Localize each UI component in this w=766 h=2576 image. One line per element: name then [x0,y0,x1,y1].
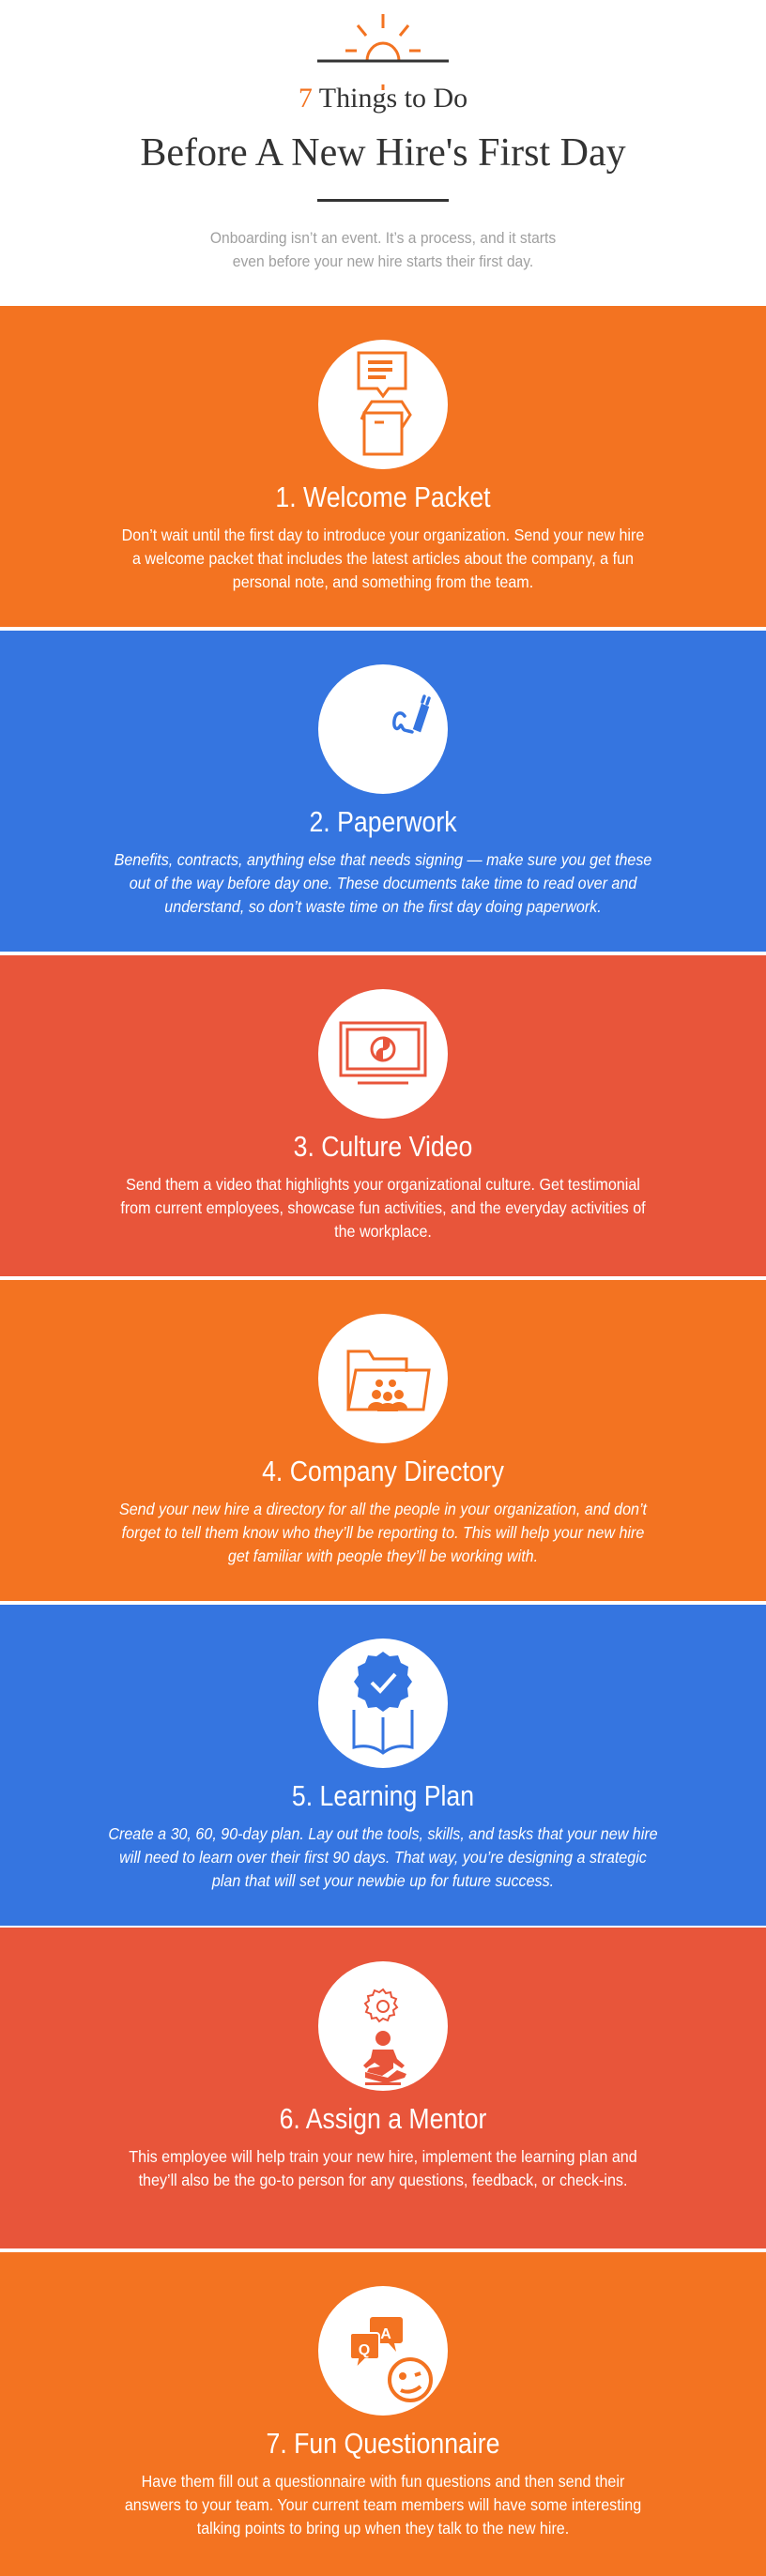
panel: 3 culture video [0,955,766,1276]
text: This employee will help train your new hire, implement the learning plan and [129,2147,637,2166]
text: will need to learn over their first 90 days. That way, you’re designing a strategic [119,1848,647,1867]
panel: 6 assign a mentor [0,1928,766,2248]
icon: Q&A bubbles with smiley [318,2286,448,2416]
text: plan that will set your newbie up for future success. [212,1871,554,1890]
text [122,526,644,591]
panel: 2 paperwork [0,631,766,952]
icon: signature pen [318,664,448,794]
title line 1: 7 Things to Do [299,83,467,114]
text: the workplace. [334,1222,432,1241]
title line 2: Before A New Hire's First Day [140,131,626,175]
text: answers to your team. Your current team members will have some interesting [125,2495,641,2514]
text [115,850,651,916]
panel: 7 fun questionnaire [0,2252,766,2576]
icon: Q&A bubbles with smiley: A [380,2326,391,2342]
subtitle: Onboarding isn’t an event. It’s a process, and it starts [210,229,556,247]
text: understand, so don’t waste time on the first day doing paperwork. [164,897,602,916]
icon: Q&A bubbles with smiley: Q [359,2342,370,2358]
text: Create a 30, 60, 90-day plan. Lay out the tools, skills, and tasks that your new hire [108,1824,658,1843]
text [108,1824,658,1890]
text [125,2472,641,2538]
panel: 5 learning plan [0,1605,766,1926]
icon: rising sun [317,14,449,90]
text: they’ll also be the go-to person for any questions, feedback, or check-ins. [139,2171,627,2189]
text: get familiar with people they’ll be working with. [228,1547,538,1565]
subtitle [210,229,556,270]
text: Have them fill out a questionnaire with fun questions and then send their [142,2472,624,2491]
heading: 5. Learning Plan [292,1779,474,1812]
text [129,2147,637,2189]
heading: 7. Fun Questionnaire [267,2427,499,2460]
icon: folder with people [318,1314,448,1443]
heading: 4. Company Directory [262,1455,504,1487]
icon: meditating person with gear [318,1961,448,2091]
text: personal note, and something from the team. [233,572,533,591]
subtitle: even before your new hire starts their first day. [233,252,533,270]
text [120,1175,646,1241]
text: out of the way before day one. These documents take time to read over and [130,874,636,892]
panel: 4 company directory [0,1280,766,1601]
heading: 1. Welcome Packet [275,480,491,513]
text: Send your new hire a directory for all the people in your organization, and don’t [119,1500,647,1518]
heading: 6. Assign a Mentor [280,2102,486,2135]
icon: book with badge [318,1639,448,1768]
text [119,1500,648,1565]
text: Send them a video that highlights your organizational culture. Get testimonial [126,1175,640,1194]
text: talking points to bring up when they talk to the new hire. [197,2519,569,2538]
text: from current employees, showcase fun activities, and the everyday activities of [120,1198,646,1217]
text: Benefits, contracts, anything else that needs signing — make sure you get these [115,850,651,869]
header [140,14,626,270]
panel: 1 welcome packet [0,306,766,627]
heading: 2. Paperwork [309,805,457,838]
text: forget to tell them know who they’ll be reporting to. This will help your new hire [122,1523,644,1542]
text: a welcome packet that includes the latest articles about the company, a fun [132,549,634,568]
icon: monitor with yin yang [318,989,448,1119]
text: Don’t wait until the first day to introduce your organization. Send your new hire [122,526,644,544]
heading: 3. Culture Video [294,1130,472,1163]
icon: welcome packet [318,340,448,469]
